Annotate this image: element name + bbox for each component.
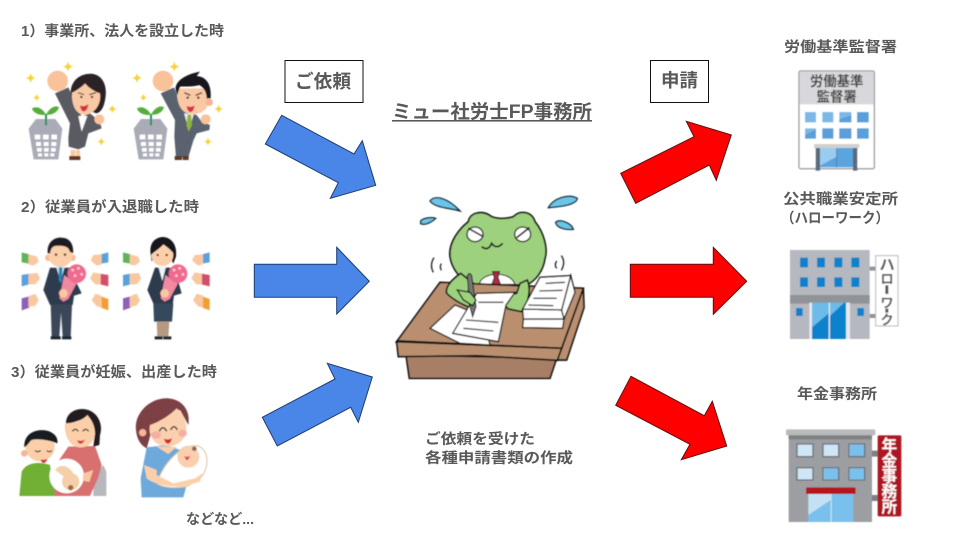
label box: application — [650, 60, 708, 102]
icon: pension office building: 事 — [882, 467, 898, 486]
heading: labor standards office: 労働基準監督署 — [784, 38, 897, 56]
heading: public employment office — [781, 190, 899, 227]
icon: paper stack — [523, 276, 575, 328]
icon: pension office building: 所 — [882, 498, 898, 516]
arrow: case 3 to office — [262, 363, 372, 446]
icon: hello work building: ク — [880, 313, 894, 328]
illustration: farewell bouquets — [22, 237, 210, 339]
icon: frog body — [450, 212, 546, 285]
icon: hello work building: ハ — [879, 257, 895, 274]
caption: request work: 各種申請書類の作成 — [425, 449, 574, 467]
icon: sparkles — [26, 61, 223, 146]
icon: labor standards office building: 監督署 — [817, 88, 857, 104]
icon: papers — [430, 305, 490, 345]
icon: man with bouquet — [43, 238, 86, 339]
heading: case 1: 1）事業所、法人を設立した時 — [21, 22, 225, 40]
icon: pen — [467, 274, 476, 317]
icon: pension office building — [786, 429, 901, 522]
icon: woman with bouquet — [147, 237, 187, 339]
arrow: case 1 to office — [265, 115, 376, 198]
arrow: office to hello work — [630, 247, 747, 314]
icon: hello work building: ワ — [880, 296, 894, 311]
icon: clapping hands left — [22, 252, 108, 310]
arrow: case 2 to office — [254, 247, 369, 314]
title: office name: ミュー社労士FP事務所 — [392, 101, 592, 123]
icon: businessman — [153, 71, 213, 160]
heading: case 2: 2）従業員が入退職した時 — [21, 198, 200, 216]
icon: expectant couple — [19, 409, 106, 496]
illustration: pregnancy and childbirth — [19, 398, 207, 497]
label box: request — [285, 60, 363, 102]
heading: pension office: 年金事務所 — [797, 385, 878, 403]
icon: pension office building: 金 — [882, 451, 898, 470]
heading: public employment office: （ハローワーク） — [781, 210, 889, 227]
icon: labor standards office building — [799, 71, 874, 171]
icon: sprout and building right — [134, 106, 167, 159]
icon: pension office building: 年 — [882, 436, 898, 455]
arrow: office to pension office — [616, 376, 727, 460]
icon: sweat drops — [421, 196, 577, 229]
icon: sprout and building left — [29, 106, 62, 159]
icon: frog shirt and tie — [479, 274, 515, 284]
icon: businesswoman — [47, 71, 106, 160]
caption: request work: ご依頼を受けた — [425, 430, 535, 448]
icon: hello work building — [790, 250, 898, 339]
icon: mother with newborn — [136, 398, 207, 497]
label box: application: 申請 — [661, 70, 698, 91]
illustration: frog at desk — [397, 196, 584, 378]
illustration: founders — [26, 61, 223, 160]
icon: desk — [406, 355, 557, 378]
icon: frog face — [467, 227, 531, 249]
caption: request work — [425, 430, 574, 467]
caption: and so on: などなど... — [186, 511, 254, 527]
label box: request: ご依頼 — [295, 71, 351, 92]
icon: pension office building: 務 — [882, 483, 898, 501]
heading: public employment office: 公共職業安定所 — [783, 190, 899, 208]
arrow: office to labor office — [621, 121, 731, 203]
icon: frog arms — [446, 273, 477, 308]
icon: hello work building: ロ — [880, 271, 894, 286]
icon: clapping hands right group — [123, 252, 210, 310]
icon: frog hand on pen — [457, 290, 476, 306]
icon: labor standards office building: 労働基準 — [810, 73, 864, 89]
heading: case 3: 3）従業員が妊娠、出産した時 — [11, 363, 218, 381]
icon: motion marks — [431, 256, 564, 272]
